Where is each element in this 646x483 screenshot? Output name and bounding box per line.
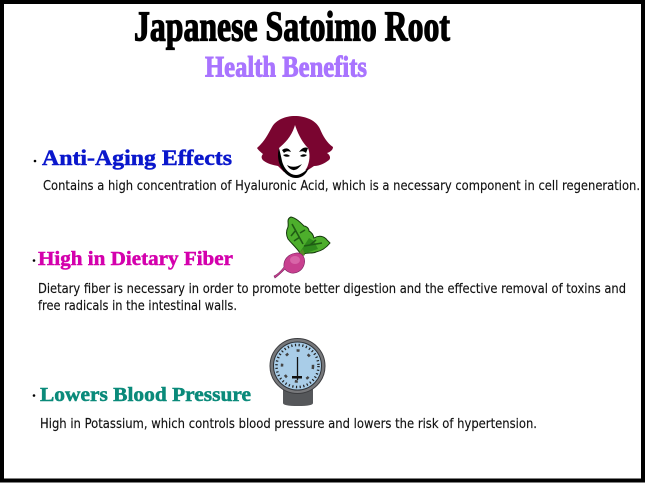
- subtitle: Health Benefits: [205, 50, 367, 84]
- body: dietary fiber: [38, 281, 626, 314]
- bullet: [33, 394, 35, 397]
- heading: dietary fiber: High in Dietary Fiber: [38, 248, 233, 270]
- body: blood pressure: High in Potassium, which controls blood pressure and lowers the risk of hypertension.: [40, 416, 537, 432]
- heading: blood pressure: Lowers Blood Pressure: [40, 384, 251, 406]
- heading: anti-aging: Anti-Aging Effects: [42, 145, 232, 170]
- bullet: [34, 160, 36, 162]
- section: blood pressure: [33, 338, 537, 432]
- icon: woman's face: [257, 116, 333, 178]
- section: anti-aging: [34, 116, 640, 194]
- title: Japanese Satoimo Root: [134, 4, 450, 50]
- bullet: [33, 259, 35, 262]
- icon: radish: [274, 217, 330, 278]
- body: dietary fiber: free radicals in the intestinal walls.: [38, 298, 237, 314]
- section: dietary fiber: [33, 217, 626, 314]
- icon: pressure gauge: [270, 338, 325, 406]
